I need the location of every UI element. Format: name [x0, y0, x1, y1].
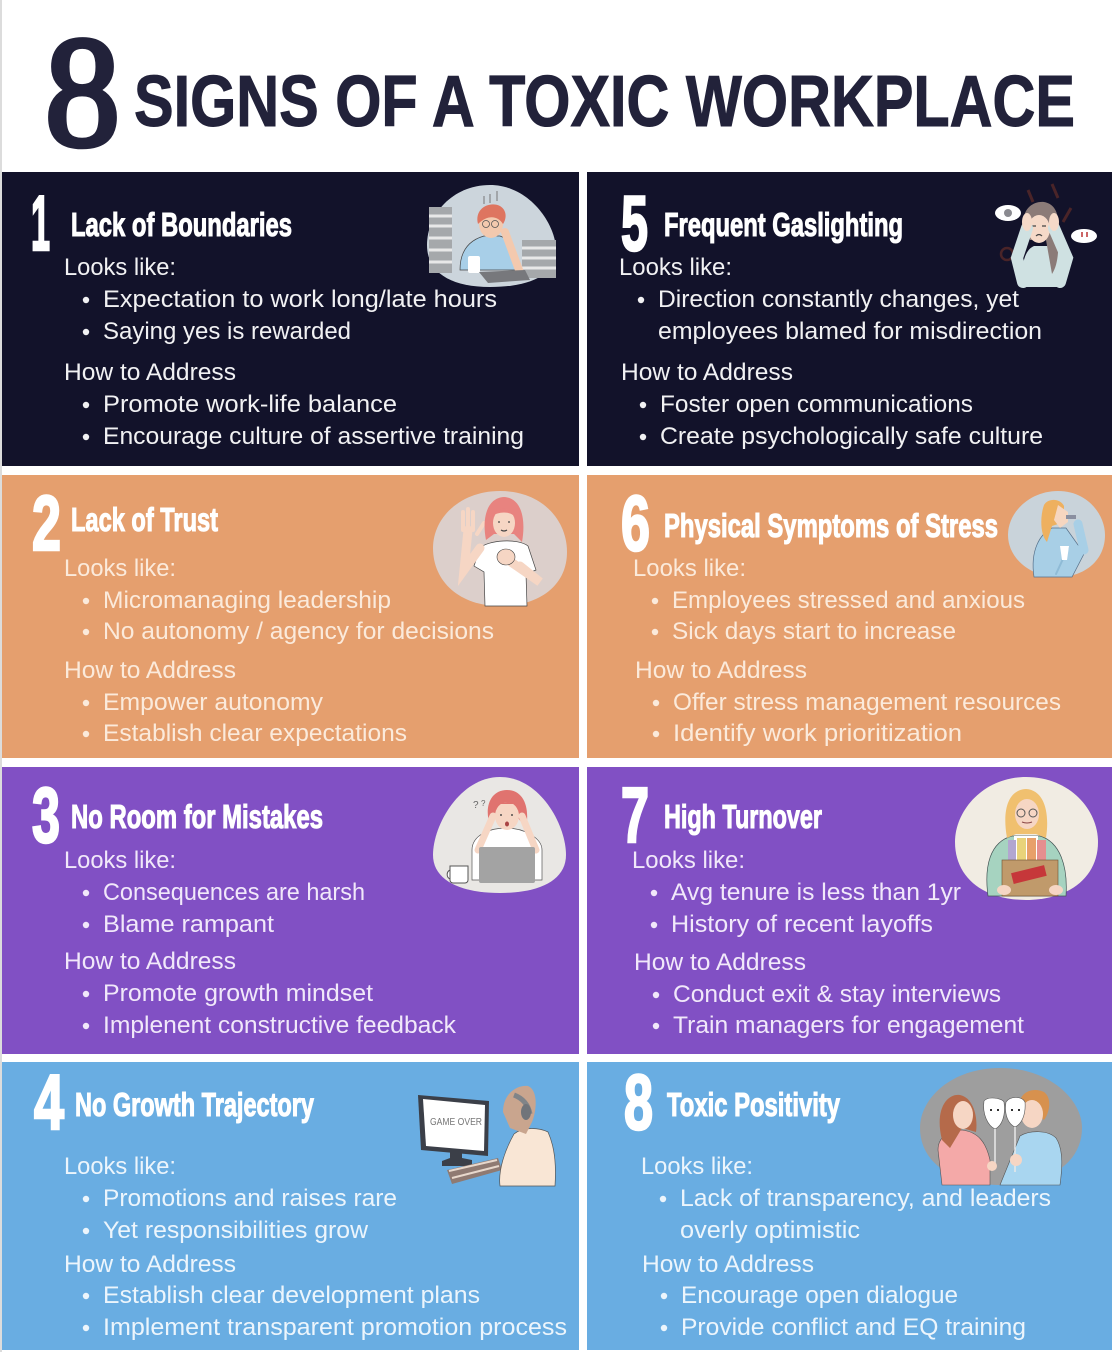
looks like list: Looks like:: [633, 555, 746, 582]
panel: 3 no room for mistakes: [2, 767, 579, 1054]
icon: woman raising hand: [433, 491, 567, 606]
looks like list: Looks like:: [64, 1153, 176, 1180]
how to address list: [635, 657, 1061, 747]
how to address list: Foster open communications: [660, 391, 973, 418]
how to address list: Identify work prioritization: [673, 720, 962, 747]
number 5: 5: [621, 179, 648, 267]
how to address list: [64, 1251, 567, 1341]
looks like list: Consequences are harsh: [103, 879, 365, 906]
panel: 5 frequent gaslighting: [587, 172, 1112, 466]
heading: Toxic Positivity: [667, 1086, 840, 1123]
number 7: 7: [621, 771, 649, 859]
how to address list: How to Address: [635, 657, 807, 684]
icon: exhausted worker among paper stacks: [427, 185, 556, 287]
looks like list: employees blamed for misdirection: [658, 318, 1042, 345]
how to address list: Encourage culture of assertive training: [103, 423, 524, 450]
looks like list: [632, 847, 961, 938]
how to address list: [64, 657, 407, 747]
looks like list: [619, 254, 1042, 345]
panel: 4 no growth trajectory: [2, 1058, 579, 1350]
number 3: 3: [32, 771, 60, 859]
looks like list: Promotions and raises rare: [103, 1185, 397, 1212]
looks like list: Looks like:: [619, 254, 732, 281]
icon: laid off woman holding box: [955, 777, 1098, 900]
looks like list: [633, 555, 1025, 645]
looks like list: Avg tenure is less than 1yr: [671, 879, 961, 906]
panel: 2 lack of trust: [2, 475, 579, 758]
number 4: 4: [34, 1058, 64, 1146]
how to address list: [64, 359, 524, 450]
panel: 1 lack of boundaries: [2, 172, 579, 466]
heading: Lack of Boundaries: [71, 206, 292, 243]
looks like list: Looks like:: [64, 555, 176, 582]
heading: High Turnover: [664, 798, 822, 835]
number 6: 6: [621, 479, 650, 567]
looks like list: Direction constantly changes, yet: [658, 286, 1019, 313]
looks like list: Looks like:: [632, 847, 745, 874]
looks like list: Expectation to work long/late hours: [103, 286, 497, 313]
looks like list: Micromanaging leadership: [103, 587, 391, 614]
how to address list: How to Address: [64, 948, 236, 975]
how to address list: Establish clear development plans: [103, 1282, 480, 1309]
how to address list: Provide conflict and EQ training: [681, 1314, 1026, 1341]
looks like list: Blame rampant: [103, 911, 274, 938]
how to address list: Offer stress management resources: [673, 689, 1061, 716]
icon: distressed woman with speech bubbles: [995, 184, 1097, 287]
looks like list: Employees stressed and anxious: [672, 587, 1025, 614]
looks like list: Looks like:: [641, 1153, 753, 1180]
how to address list: Conduct exit & stay interviews: [673, 981, 1001, 1008]
heading: No Room for Mistakes: [71, 798, 323, 835]
how to address list: How to Address: [64, 1251, 236, 1278]
icon: couple holding smiling masks: [920, 1068, 1082, 1185]
heading: Physical Symptoms of Stress: [664, 507, 998, 544]
title: [45, 5, 1075, 180]
how to address list: How to Address: [642, 1251, 814, 1278]
looks like list: [64, 847, 365, 938]
looks like list: overly optimistic: [680, 1217, 860, 1244]
how to address list: [621, 359, 1043, 450]
how to address list: Empower autonomy: [103, 689, 323, 716]
number 8: 8: [624, 1058, 653, 1146]
icon: stressed woman at laptop: [433, 777, 566, 893]
looks like list: Saying yes is rewarded: [103, 318, 351, 345]
looks like list: Yet responsibilities grow: [103, 1217, 369, 1244]
panel: 1 lack of boundaries: 1: [31, 179, 50, 267]
looks like list: Sick days start to increase: [672, 618, 956, 645]
how to address list: How to Address: [634, 949, 806, 976]
panel: 7 high turnover: [587, 767, 1112, 1054]
looks like list: [641, 1153, 1051, 1244]
how to address list: [642, 1251, 1026, 1341]
panel: 8 toxic positivity: [587, 1058, 1112, 1350]
icon: woman with blue sweater coughing: [1008, 491, 1105, 577]
how to address list: Promote work-life balance: [103, 391, 397, 418]
looks like list: Lack of transparency, and leaders: [680, 1185, 1051, 1212]
looks like list: [64, 1153, 397, 1244]
how to address list: [634, 949, 1024, 1039]
looks like list: No autonomy / agency for decisions: [103, 618, 494, 645]
icon: person at computer with game over screen: GAME OVER: [430, 1117, 482, 1128]
how to address list: [64, 948, 457, 1039]
looks like list: [64, 555, 494, 645]
number 2: 2: [32, 479, 61, 567]
how to address list: Implement transparent promotion process: [103, 1314, 567, 1341]
how to address list: How to Address: [621, 359, 793, 386]
how to address list: Encourage open dialogue: [681, 1282, 958, 1309]
heading: Frequent Gaslighting: [664, 206, 903, 243]
panel: 6 physical symptoms of stress: [587, 475, 1112, 758]
heading: No Growth Trajectory: [75, 1086, 314, 1123]
icon: person at computer with game over screen: [418, 1086, 555, 1186]
looks like list: Looks like:: [64, 847, 176, 874]
looks like list: [64, 254, 497, 345]
how to address list: How to Address: [64, 657, 236, 684]
looks like list: History of recent layoffs: [671, 911, 933, 938]
how to address list: How to Address: [64, 359, 236, 386]
how to address list: Create psychologically safe culture: [660, 423, 1043, 450]
how to address list: Train managers for engagement: [673, 1012, 1024, 1039]
looks like list: Looks like:: [64, 254, 176, 281]
how to address list: Promote growth mindset: [103, 980, 373, 1007]
icon: stressed woman at laptop: ?: [473, 800, 479, 811]
heading: Lack of Trust: [71, 501, 218, 538]
title: 8: [45, 5, 120, 180]
icon: stressed woman at laptop: ?: [481, 799, 486, 808]
how to address list: Implenent constructive feedback: [103, 1012, 457, 1039]
how to address list: Establish clear expectations: [103, 720, 407, 747]
